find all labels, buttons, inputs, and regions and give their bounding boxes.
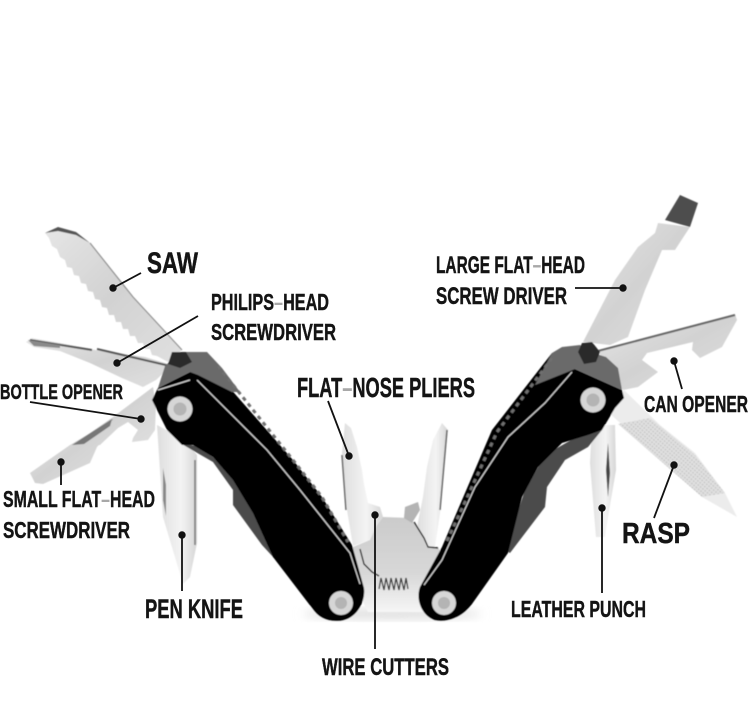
handle: lower plate [505,430,602,553]
tool: flat-nose pliers [342,423,453,612]
pivot: right top [578,342,600,364]
right handle top screw [580,388,606,412]
pliers spring [379,578,408,590]
label: flat-nose pliers: FLAT–NOSE PLIERS [297,372,475,403]
tool: leather punch [590,425,616,537]
pivot: left top [168,352,192,368]
label: large flat-head screw driver: LARGE FLAT–HEAD [436,252,585,279]
label: wire cutters: WIRE CUTTERS [322,654,449,681]
handle: grey bolster [535,345,622,390]
label: Philips-head screwdriver: PHILIPS–HEAD [211,289,329,315]
pliers jaw: left [342,423,383,546]
label: large flat-head screw driver [436,252,627,310]
left handle [152,352,364,621]
right handle bottom screw [432,591,456,615]
handle: lower plate [180,443,274,558]
tool: pen knife [157,425,197,584]
label: Philips-head screwdriver: SCREWDRIVER [211,319,336,345]
tool: large flat-head screwdriver [583,195,698,345]
label: bottle opener: BOTTLE OPENER [0,381,123,404]
tool: can opener [598,314,737,390]
label: wire cutters [322,511,449,681]
handle: black body [419,353,624,621]
right handle [419,342,624,621]
tool: bottle opener [70,387,156,447]
tool: saw blade [45,227,182,362]
tool: rasp [608,390,737,517]
label: saw [109,247,199,292]
label: bottle opener [0,381,145,423]
pliers pivot body [345,517,453,612]
tool: Philips-head screwdriver [26,338,172,387]
label: rasp [622,461,690,550]
handle: grey bolster [158,352,240,392]
label: pen knife [145,531,243,624]
label: Philips-head screwdriver [113,289,336,367]
pliers jaw: right [417,423,448,547]
label: saw: SAW [147,247,199,280]
label: leather punch [511,504,646,622]
label: can opener [644,357,748,417]
ground shadow [302,609,482,619]
label: small flat-head screwdriver [3,458,155,543]
handle: black body [152,362,364,621]
left handle top screw [168,396,192,422]
label: small flat-head screwdriver: SCREWDRIVER [3,517,130,543]
left handle bottom screw [329,591,353,615]
label: small flat-head screwdriver: SMALL FLAT–HEAD [3,486,155,512]
label: large flat-head screw driver: SCREW DRIVER [436,283,567,310]
label: flat-nose pliers [297,372,475,460]
multi-tool illustration [26,195,737,621]
label: leather punch: LEATHER PUNCH [511,596,646,622]
tool: small flat-head screwdriver [30,419,112,484]
label: rasp: RASP [622,518,690,550]
label: pen knife: PEN KNIFE [145,594,243,624]
